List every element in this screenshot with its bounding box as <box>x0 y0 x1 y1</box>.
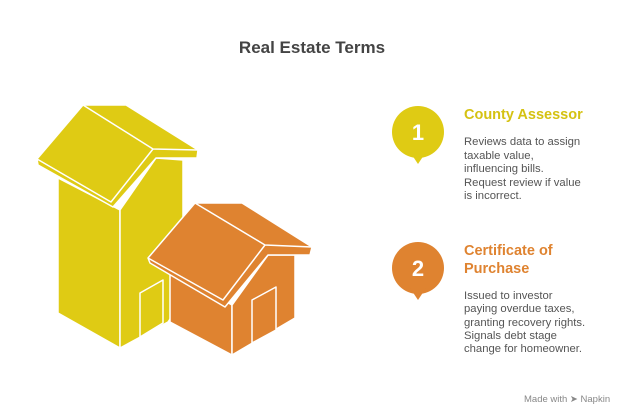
text block: County Assessor: County Assessor <box>464 107 583 123</box>
text block: Certificate of Purchase: change for homeowner. <box>464 343 582 355</box>
text block: Certificate of Purchase: Issued to investor <box>464 290 553 302</box>
icon: yellow tall house <box>37 105 198 348</box>
text block: Certificate of Purchase: Certificate of <box>464 243 553 259</box>
marker 1: 1 <box>412 120 424 145</box>
text block: Certificate of Purchase: Signals debt stage <box>464 330 557 342</box>
text block: County Assessor: influencing bills. <box>464 163 544 175</box>
text block: County Assessor: is incorrect. <box>464 190 522 202</box>
text block: County Assessor <box>464 107 583 202</box>
text block: County Assessor: Reviews data to assign <box>464 136 580 148</box>
text block: Certificate of Purchase: paying overdue taxes, <box>464 303 575 315</box>
text block: Certificate of Purchase <box>464 243 585 355</box>
marker 1 <box>392 106 444 164</box>
footer: made with napkin: Made with ➤ Napkin <box>524 394 610 405</box>
text block: County Assessor: Request review if value <box>464 176 581 188</box>
icon: orange small house <box>148 203 312 355</box>
title: Real Estate Terms <box>239 38 385 57</box>
marker 2 <box>392 242 444 300</box>
text block: Certificate of Purchase: granting recovery rights. <box>464 317 585 329</box>
marker 2: 2 <box>412 256 424 281</box>
text block: County Assessor: taxable value, <box>464 150 534 162</box>
text block: Certificate of Purchase: Purchase <box>464 261 529 277</box>
